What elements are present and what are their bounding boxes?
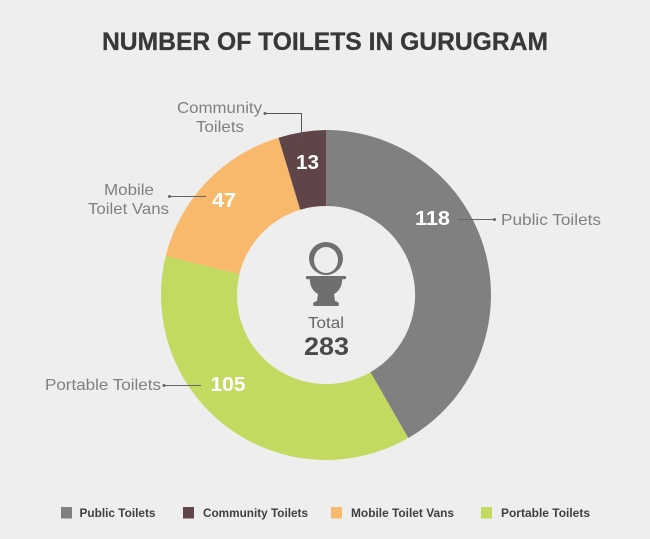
legend xyxy=(61,506,590,520)
segment: community toilets xyxy=(278,130,326,210)
segment: public toilets xyxy=(326,130,491,438)
legend: community toilets: Community Toilets xyxy=(203,506,308,520)
label: community toilets with leader xyxy=(177,100,302,139)
donut chart xyxy=(161,130,491,460)
title: NUMBER OF TOILETS IN GURUGRAM xyxy=(102,28,548,56)
icon: toilet xyxy=(306,242,346,306)
label: portable toilets with leader: Portable Toilets xyxy=(45,377,161,394)
label: public toilets with leader xyxy=(458,212,601,229)
label: mobile toilet vans with leader: Mobile xyxy=(104,182,154,199)
value: 118: 118 xyxy=(415,208,450,230)
legend: mobile toilet vans: Mobile Toilet Vans xyxy=(351,506,454,520)
label: community toilets with leader: Community xyxy=(177,100,262,117)
label: public toilets with leader: Public Toilets xyxy=(501,212,601,229)
total value: 283 xyxy=(304,333,349,361)
value: 13: 13 xyxy=(296,152,319,174)
label: portable toilets with leader xyxy=(45,377,201,394)
legend: public toilets: Public Toilets xyxy=(80,506,156,520)
legend: portable toilets: Portable Toilets xyxy=(501,506,590,520)
label: mobile toilet vans with leader xyxy=(88,182,206,218)
value: 47: 47 xyxy=(212,190,236,212)
label: mobile toilet vans with leader: Toilet Vans xyxy=(88,201,169,218)
label: community toilets with leader: Toilets xyxy=(196,119,244,136)
segment: portable toilets xyxy=(161,256,408,460)
total label: Total xyxy=(308,315,344,332)
value: 105: 105 xyxy=(210,374,246,396)
segment: mobile toilet vans xyxy=(166,138,300,274)
